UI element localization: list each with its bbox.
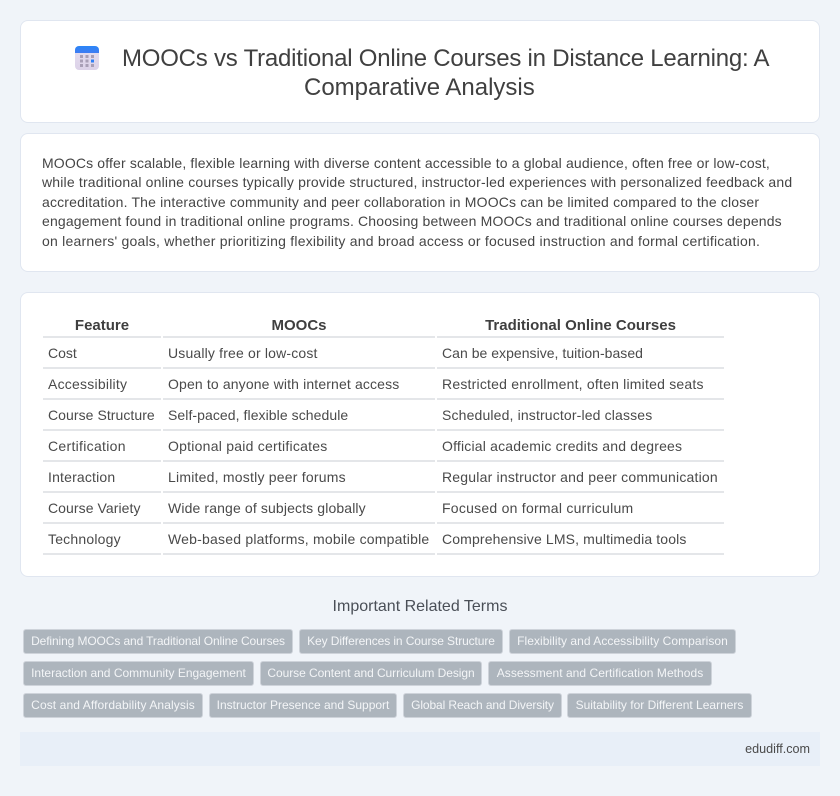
footer bar [20,732,820,766]
table rows: Interaction [48,469,115,485]
panel: comparison table [20,292,820,577]
table rows: Open to anyone with internet access [168,376,399,392]
table rows: Web-based platforms, mobile compatible [168,531,429,547]
tag group: related terms: Defining MOOCs and Traditional Online Courses [31,634,285,648]
title: MOOCs vs Traditional Online Courses in Distance Learning: A [122,45,769,72]
table rows: Restricted enrollment, often limited seats [442,376,704,392]
tag group: related terms: Interaction and Community Engagement [31,666,246,680]
panel: summary [20,133,820,272]
footer credit: edudiff.com [745,742,810,756]
table rows: Comprehensive LMS, multimedia tools [442,531,687,547]
tag group: related terms: Global Reach and Diversity [411,698,554,712]
text block: summary paragraph [42,155,792,249]
tag group: related terms: Course Content and Curriculum Design [267,666,475,680]
title: Comparative Analysis [304,74,535,101]
icon: calendar [75,46,99,70]
text block: summary paragraph: accreditation. The interactive community and peer collaboration in MOOCs can be limited compared to the closer [42,194,759,210]
tag group: related terms: Suitability for Different Learners [576,698,743,712]
table rows: Wide range of subjects globally [168,500,366,516]
text block: summary paragraph: on learners' goals, whether prioritizing flexibility and broad access or focused instruction and formal certification. [42,233,760,249]
table header: Feature [75,317,129,334]
table rows: Accessibility [48,376,127,392]
table rows: Self-paced, flexible schedule [168,407,348,423]
table rows: Cost [48,345,77,361]
table rows: Certification [48,438,126,454]
text block: summary paragraph: while traditional online courses typically provide structured, instructor-led experiences with personalized feedback and [42,174,792,190]
table header [75,317,676,334]
tag group: related terms: Cost and Affordability Analysis [31,698,195,712]
table rows: Scheduled, instructor-led classes [442,407,652,423]
table rows: Regular instructor and peer communication [442,469,718,485]
tag group: related terms: Instructor Presence and Support [217,698,389,712]
table header: MOOCs [271,317,326,334]
table rows: Official academic credits and degrees [442,438,682,454]
tag group: related terms: Key Differences in Course Structure [307,634,495,648]
table rows: Can be expensive, tuition-based [442,345,643,361]
text block: summary paragraph: engagement found in traditional online programs. Choosing between MOOCs and traditional online courses depends [42,213,782,229]
table header: Traditional Online Courses [485,317,676,334]
heading: important related terms: Important Related Terms [333,598,507,615]
table rows: Usually free or low-cost [168,345,318,361]
tag group: related terms: Flexibility and Accessibility Comparison [517,634,728,648]
tag group: related terms [23,629,752,718]
table rows: Technology [48,531,121,547]
panel: header [20,20,820,123]
table rows: Course Variety [48,500,141,516]
title [122,45,770,101]
tag group: related terms: Assessment and Certification Methods [497,666,703,680]
text block: summary paragraph: MOOCs offer scalable, flexible learning with diverse content accessible to a global audience, often free or low-cost, [42,155,770,171]
table rows: Limited, mostly peer forums [168,469,346,485]
table rows: Focused on formal curriculum [442,500,633,516]
table rows: Optional paid certificates [168,438,328,454]
table rows [43,336,724,555]
table rows: Course Structure [48,407,155,423]
